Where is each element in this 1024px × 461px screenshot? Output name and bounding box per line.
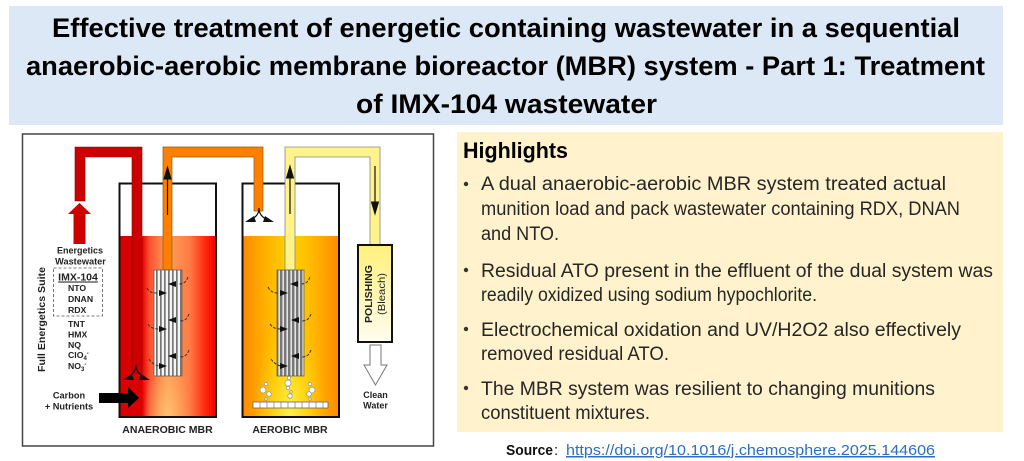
bullet 3: Electrochemical oxidation and UV/H2O2 also effectively [481,320,962,341]
IMX-104 constituents box: RDX [68,305,87,315]
process diagram panel [22,134,434,446]
diagram labels: Water [363,400,388,410]
source citation: : [554,442,558,459]
orange pipe [163,147,263,270]
bullet 3: removed residual ATO. [481,344,669,365]
diagram labels: Wastewater [55,256,106,266]
IMX-104 constituents box [54,268,102,316]
other energetics list: 3 [81,367,85,373]
bullet 2 [464,261,993,306]
other energetics list [68,319,89,373]
full energetics suite label: Full Energetics Suite [36,267,48,372]
source citation: Source [506,442,553,459]
title banner: Effective treatment of energetic containing wastewater in a sequential [52,13,960,43]
other energetics list: 4 [83,356,87,362]
other energetics list: HMX [68,330,88,340]
bullet 1: A dual anaerobic-aerobic MBR system treated actual [481,174,946,195]
bullet 2: readily oxidized using sodium hypochlorite. [481,285,817,306]
bullet 4: constituent mixtures. [481,403,650,424]
diagram labels: AEROBIC MBR [252,424,328,436]
anaerobic tank [120,184,216,417]
bullet 4: The MBR system was resilient to changing munitions [481,379,935,400]
splitter arrows aerobic [245,208,274,222]
other energetics list: NQ [68,340,81,350]
membrane module aerobic [268,270,311,376]
bullet 3 [464,320,962,365]
diagram labels: Energetics [57,246,103,256]
highlights heading: Highlights [463,138,568,163]
source citation: https://doi.org/10.1016/j.chemosphere.2025.144606 [566,442,935,459]
diagram labels: ANAEROBIC MBR [122,424,213,436]
polishing unit: POLISHING [363,265,375,323]
title banner: anaerobic-aerobic membrane bioreactor (MBR) system - Part 1: Treatment [26,51,985,81]
other energetics list: TNT [68,319,86,329]
other energetics list: NO [68,361,81,371]
title banner [9,6,1003,125]
other energetics list: - [84,362,86,368]
yellow pipe [285,147,380,270]
diagram labels: + Nutrients [45,402,93,412]
aerobic tank [242,184,339,417]
flow arrows in pipes [164,166,378,215]
other energetics list: - [87,351,89,357]
clean water arrow [364,345,387,385]
splitter arrows anaerobic [123,365,150,380]
bullet 4 [464,379,935,424]
diagram labels: Clean [363,390,388,400]
polishing unit: (Bleach) [376,273,388,315]
highlights panel [457,132,1003,432]
bullet 1: munition load and pack wastewater containing RDX, DNAN [481,199,960,220]
IMX-104 constituents box: IMX-104 [58,272,98,284]
membrane module anaerobic [147,270,189,376]
bullet 1 [464,174,960,245]
polishing unit [358,245,392,342]
red influent pipe [75,147,142,373]
IMX-104 constituents box: DNAN [68,294,93,304]
red inflow arrow [68,203,91,244]
other energetics list: ClO [68,350,83,360]
air diffuser [253,402,328,408]
IMX-104 constituents box: NTO [68,283,86,293]
diagram labels: Carbon [53,390,85,400]
diagram labels [45,246,388,436]
title banner: of IMX-104 wastewater [356,89,658,119]
bullet 2: Residual ATO present in the effluent of the dual system was [481,261,993,282]
air bubbles [260,376,315,400]
carbon inlet arrow [99,387,139,408]
bullet 1: and NTO. [481,224,559,245]
